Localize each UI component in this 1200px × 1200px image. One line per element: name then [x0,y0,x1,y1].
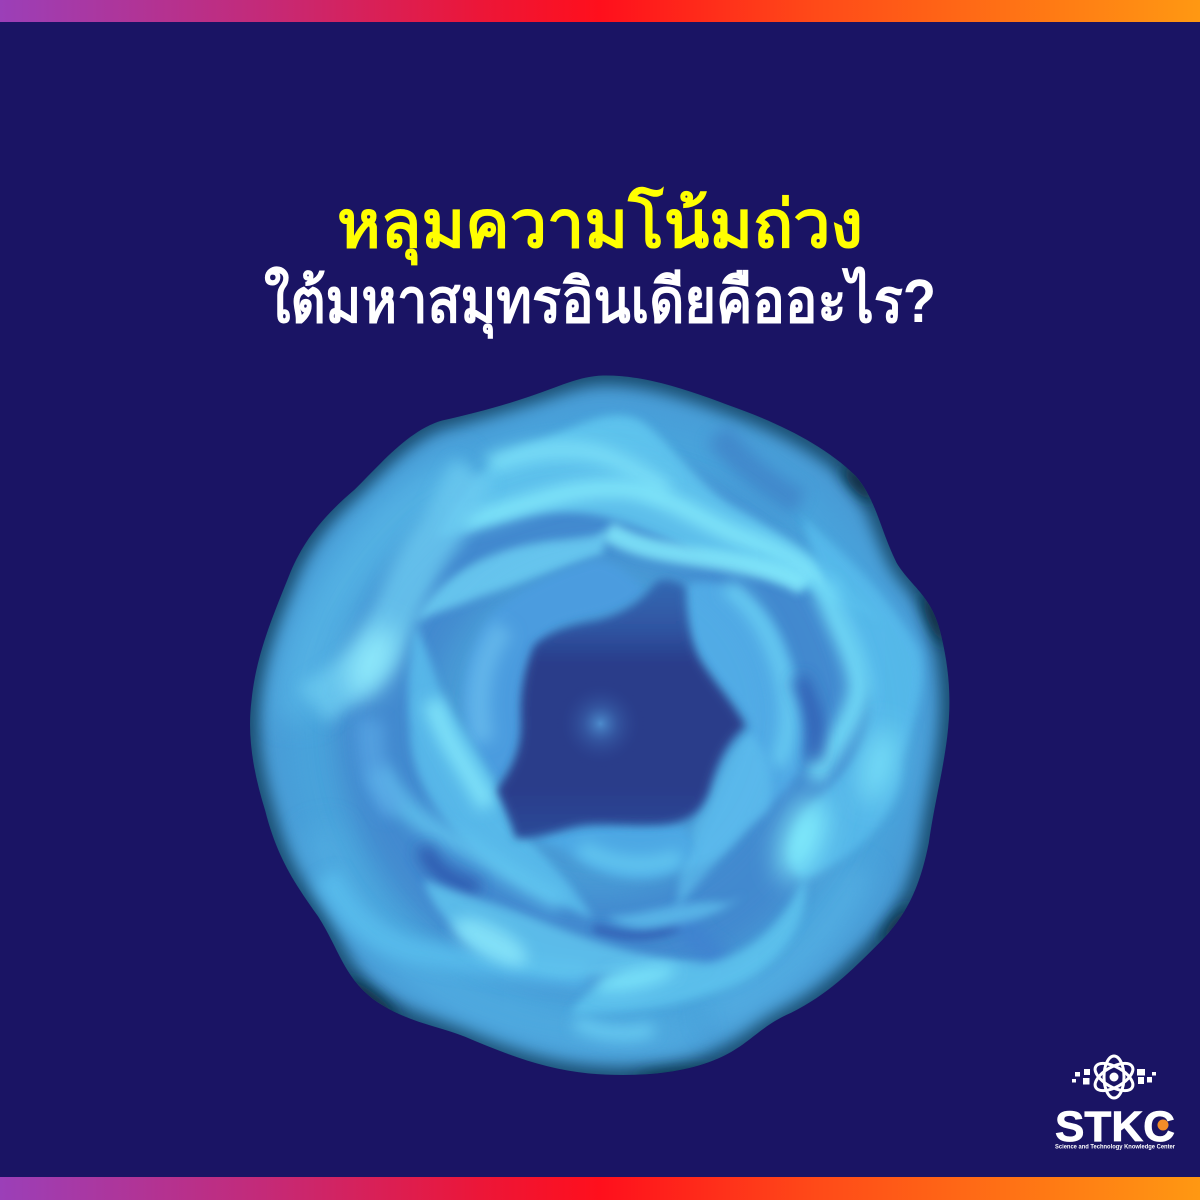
lower inner fold [424,880,708,976]
lower bright spot [446,914,530,972]
logo wordmark: STKC [1055,1103,1175,1151]
bright ridge 2 [460,488,837,590]
swirling bands [299,415,923,1038]
title [264,185,936,339]
outer soft left band [299,473,470,719]
lower right inner fold [676,733,771,912]
ridge right of top crossing [607,531,805,586]
inner ring highlight [479,627,504,742]
inner left band [408,627,594,919]
illustration: swirling blue gravity hole [250,376,950,1075]
left inner pale band [378,769,561,903]
right vertical band [790,517,923,880]
bright top ridge [488,450,667,492]
inner top-left band [417,528,607,620]
top band [446,412,824,594]
logo tagline: Science and Technology Knowledge Center [1055,1144,1176,1150]
bottom gradient bar [0,1177,1200,1200]
left bright spot [336,618,406,705]
mid body tint [309,434,892,1017]
bottom inner band [546,826,688,876]
right inner highlight [727,586,788,765]
small lower wisp [610,898,733,932]
lower right sweep [571,875,806,1013]
left inner column [370,719,396,811]
outer soft bottom left [318,829,699,1038]
left bright band [313,471,474,705]
right upper highlight [856,724,901,806]
title line 1: หลุมความโน้มถ่วง [337,185,863,266]
STKC logo [1055,1054,1176,1151]
central dark hole [497,580,745,838]
dark edge accents [340,461,954,1084]
outer soft lower right [720,888,856,1034]
lower bright band [327,875,589,976]
top gradient bar [0,0,1200,22]
pixel squares [1072,1069,1156,1084]
bottom streak [575,1022,653,1033]
atom icon [1091,1056,1137,1098]
right bright spot [769,791,836,886]
vortex outer body [250,375,954,1084]
inner left highlight [433,701,488,806]
inner ring top-left soft [483,563,638,774]
dark folds [424,848,479,889]
right ridge [814,586,860,779]
center glow [557,680,644,767]
inner ring right [681,582,804,867]
title line 2: ใต้มหาสมุทรอินเดียคืออะไร? [264,266,936,339]
orange dot [1158,1120,1168,1130]
